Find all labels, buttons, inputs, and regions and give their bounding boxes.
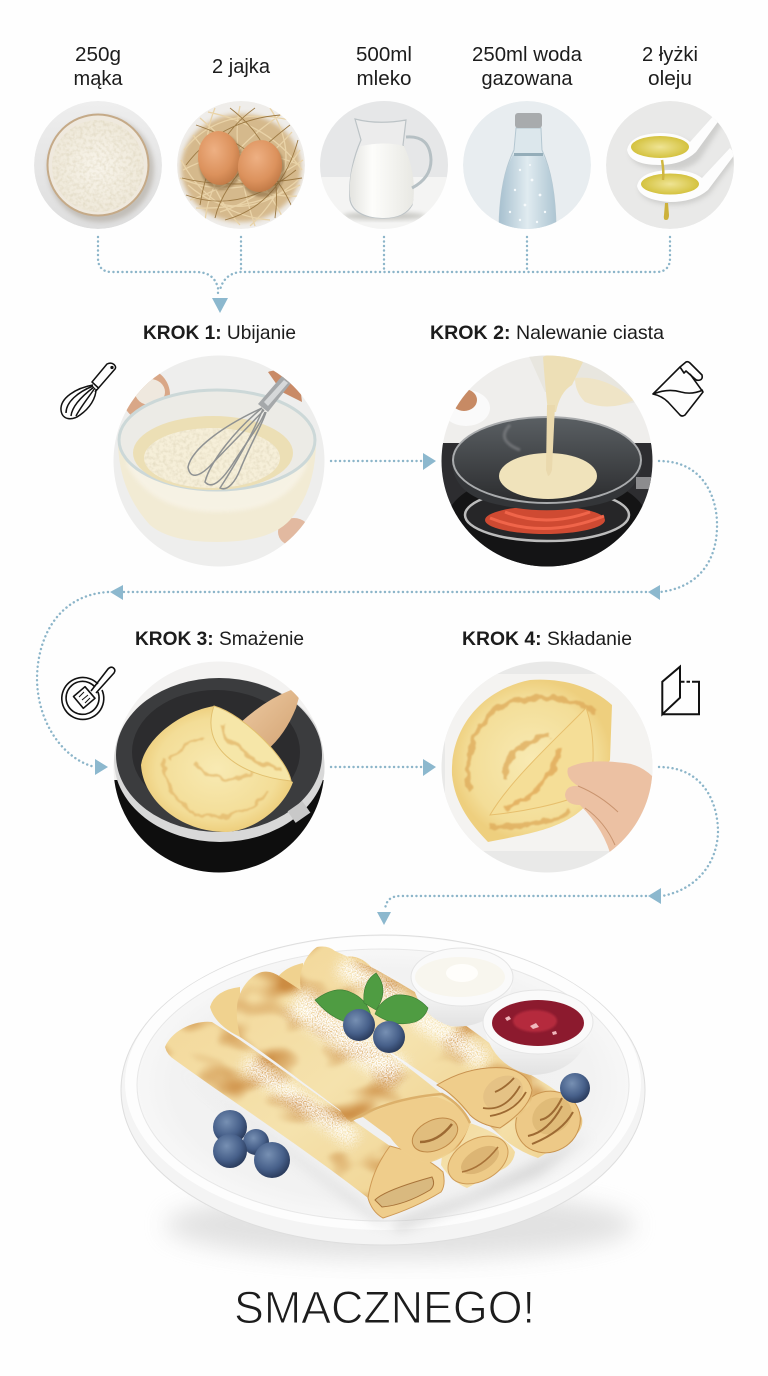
crepe: center small roll <box>440 1123 516 1194</box>
photo: crepe in frying pan <box>114 662 324 872</box>
crepe: back roll <box>277 946 533 1128</box>
crepe: middle roll <box>210 972 470 1163</box>
label: 250g mąka: 250g <box>75 43 121 66</box>
icon: pan with spatula <box>62 667 115 719</box>
photo: jug of milk <box>320 100 448 229</box>
photo: pouring batter into pan <box>440 350 660 573</box>
arrow: step 1 to step 2 <box>331 453 436 470</box>
label: 250ml woda gazowana: gazowana <box>482 67 573 90</box>
label: 2 łyżki oleju: oleju <box>648 67 692 90</box>
photo: eggs in a straw nest <box>177 101 305 229</box>
arrow: step 3 to step 4 <box>331 759 436 776</box>
panel: ingredient oil <box>606 43 737 229</box>
label: 250g mąka: mąka <box>74 67 123 90</box>
blueberries <box>213 1009 590 1178</box>
panel: ingredient flour <box>34 43 162 229</box>
shadow: rolls on plate <box>180 1070 590 1232</box>
label: 500ml mleko: 500ml <box>356 43 412 66</box>
panel: step 3 frying <box>62 628 330 880</box>
heading: KROK 3: KROK 3: Smażenie <box>135 628 304 650</box>
heading: KROK 2: KROK 2: Nalewanie ciasta <box>430 322 664 344</box>
mint leaves <box>315 973 428 1024</box>
photo: hand folding a crepe <box>442 662 652 872</box>
plate <box>121 935 645 1245</box>
heading: KROK 1: KROK 1: Ubijanie <box>143 322 296 344</box>
bowl of berry jam <box>483 990 593 1075</box>
crepe: back right roll <box>450 1040 592 1164</box>
label: 2 łyżki oleju: 2 łyżki <box>642 43 698 66</box>
panel: finished pancakes on plate <box>121 935 645 1259</box>
panel: ingredient eggs <box>177 55 305 229</box>
label: 250ml woda gazowana: 250ml woda <box>472 43 583 66</box>
photo: two spoons of oil <box>606 101 737 229</box>
panel: ingredient sparkling water <box>463 43 591 232</box>
crepe: front roll <box>165 1022 444 1218</box>
icon: measuring jug <box>653 362 703 416</box>
shadow: plate shadow <box>165 1191 635 1259</box>
icon: folded sheet <box>662 667 699 714</box>
bowl of sour cream <box>411 948 513 1027</box>
heading: KROK 4: KROK 4: Składanie <box>462 628 632 650</box>
photo: bottle of sparkling water <box>463 101 591 232</box>
panel: step 1 whisking <box>61 322 330 570</box>
rolled crepes <box>165 946 592 1218</box>
icon: whisk <box>61 363 116 419</box>
photo: bowl with batter and whisk <box>110 350 330 570</box>
arrow: step 4 down to final plate <box>377 767 718 925</box>
closing text: SMACZNEGO!: SMACZNEGO! <box>234 1282 535 1333</box>
panel: step 2 pouring <box>430 322 703 573</box>
label: 500ml mleko: mleko <box>356 67 412 90</box>
panel: step 4 folding <box>440 628 699 880</box>
arrow: ingredients merge into step 1 <box>98 237 670 313</box>
arrow: step 2 down and back to step 3 <box>37 461 717 775</box>
photo: bowl of flour <box>34 101 162 229</box>
label: 2 jajka: 2 jajka <box>212 55 271 78</box>
panel: ingredient milk <box>320 43 448 229</box>
